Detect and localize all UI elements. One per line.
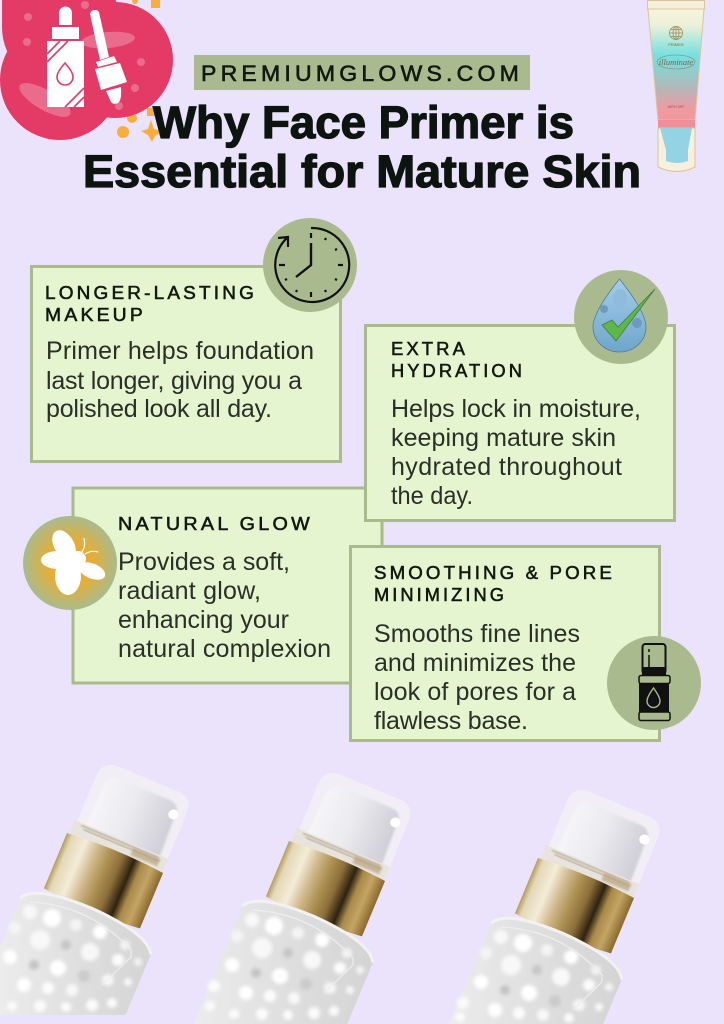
text: extra hydration: keeping mature skin bbox=[391, 424, 616, 452]
panel: extra hydration bbox=[366, 326, 674, 520]
icon: firefly bbox=[23, 516, 117, 610]
text: extra hydration: the day. bbox=[391, 482, 473, 510]
product tube bbox=[648, 0, 704, 172]
product tube: WITH SPF bbox=[668, 105, 684, 109]
text: extra hydration: hydrated throughout bbox=[391, 453, 622, 481]
product tube: PRIMER bbox=[668, 42, 684, 47]
text: smoothing and pore minimizing: flawless base. bbox=[374, 707, 528, 735]
panel: natural glow bbox=[73, 488, 382, 683]
heading: longer-lasting makeup: LONGER-LASTING bbox=[45, 283, 257, 303]
website banner: PREMIUMGLOWS.COM bbox=[201, 61, 523, 86]
text: natural glow: radiant glow, bbox=[118, 577, 261, 605]
photo: primer pump bottle 3 bbox=[449, 783, 665, 1024]
panel: smoothing and pore minimizing bbox=[350, 546, 660, 740]
heading: longer-lasting makeup bbox=[45, 283, 257, 325]
icon: primer bottle bbox=[607, 636, 701, 730]
heading: smoothing and pore minimizing bbox=[374, 563, 615, 605]
text: longer-lasting makeup bbox=[46, 337, 314, 423]
icon: serum bottle and dropper on red blob bbox=[0, 0, 173, 140]
heading: smoothing and pore minimizing: MINIMIZING bbox=[374, 585, 507, 605]
text: extra hydration: Helps lock in moisture, bbox=[391, 395, 641, 423]
text: longer-lasting makeup: last longer, giving you a bbox=[46, 367, 302, 395]
product tube: illuminate bbox=[659, 57, 693, 67]
heading: longer-lasting makeup: MAKEUP bbox=[45, 305, 146, 325]
photo: primer pump bottle 1 bbox=[0, 758, 194, 1015]
text: longer-lasting makeup: Primer helps foundation bbox=[46, 337, 314, 365]
text: smoothing and pore minimizing bbox=[374, 620, 580, 735]
title: Why Face Primer is bbox=[153, 97, 574, 148]
text: natural glow: enhancing your bbox=[118, 606, 289, 634]
heading: smoothing and pore minimizing: SMOOTHING & PORE bbox=[374, 563, 615, 583]
text: natural glow bbox=[118, 548, 331, 663]
icon: clock bbox=[263, 218, 357, 312]
orange confetti bbox=[117, 0, 163, 142]
heading: extra hydration bbox=[391, 339, 525, 381]
text: natural glow: natural complexion bbox=[118, 635, 331, 663]
text: extra hydration bbox=[391, 395, 641, 510]
text: natural glow: Provides a soft, bbox=[118, 548, 290, 576]
icon: water drop with check mark bbox=[574, 270, 668, 364]
text: smoothing and pore minimizing: look of pores for a bbox=[374, 678, 576, 706]
photo: primer pump bottle 2 bbox=[193, 766, 416, 1024]
heading: extra hydration: EXTRA bbox=[391, 339, 468, 359]
title bbox=[83, 97, 641, 197]
website banner bbox=[194, 55, 530, 90]
text: smoothing and pore minimizing: Smooths fine lines bbox=[374, 620, 580, 648]
panel: longer-lasting makeup bbox=[32, 266, 340, 462]
heading: extra hydration: HYDRATION bbox=[391, 361, 525, 381]
text: longer-lasting makeup: polished look all day. bbox=[46, 395, 272, 423]
title: Essential for Mature Skin bbox=[83, 146, 641, 197]
text: smoothing and pore minimizing: and minimizes the bbox=[374, 649, 576, 677]
heading: natural glow: NATURAL GLOW bbox=[118, 514, 313, 534]
